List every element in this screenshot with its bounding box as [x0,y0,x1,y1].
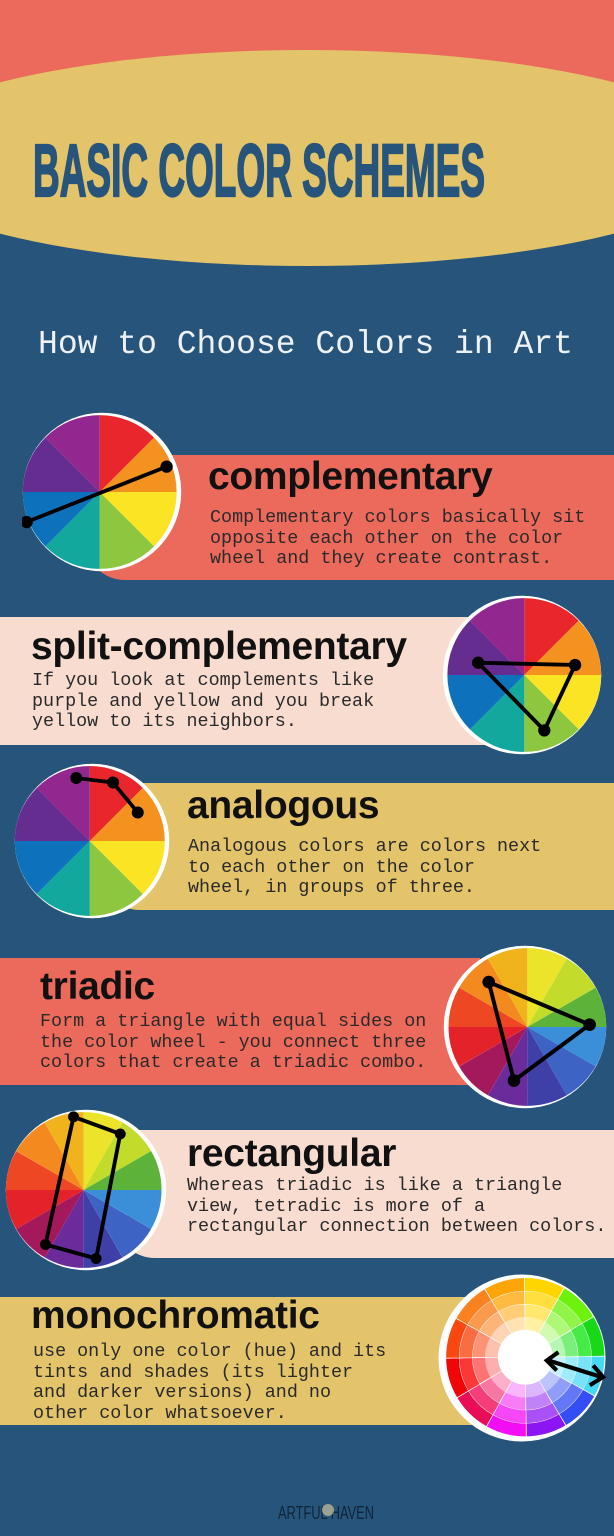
text: split-complementary description: purple and yellow and you break [32,691,374,712]
text: rectangular description [187,1175,606,1237]
text: split-complementary description [32,670,374,732]
text: monochromatic description: tints and shades (its lighter [33,1362,353,1383]
header background [0,0,614,266]
text: rectangular description: view, tetradic is more of a [187,1196,485,1217]
icon: analogous wheel [14,764,170,918]
text: analogous description: wheel, in groups of three. [188,877,475,898]
text: monochromatic description: use only one color (hue) and its [33,1341,386,1362]
icon: complementary wheel [22,412,182,572]
text: monochromatic description: other color whatsoever. [33,1403,287,1424]
heading: analogous: analogous [187,784,379,827]
heading: complementary: complementary [208,455,492,498]
text: analogous description [188,836,541,898]
subtitle: How to Choose Colors in Art [38,326,573,363]
text: triadic description [40,1011,426,1073]
heading: split-complementary: split-complementary [31,625,407,668]
text: analogous description: to each other on the color [188,857,475,878]
text: complementary description: opposite each other on the color [210,528,563,549]
heading: monochromatic: monochromatic [31,1294,320,1337]
text: split-complementary description: If you look at complements like [32,670,374,691]
heading: triadic: triadic [40,965,155,1008]
text: monochromatic description [33,1341,386,1424]
panel: triadic [0,946,606,1108]
icon: split-complementary wheel [442,596,602,754]
panel: split-complementary [0,596,602,754]
panel: monochromatic [0,1274,606,1442]
text: monochromatic description: and darker versions) and no [33,1382,331,1403]
text: analogous description: Analogous colors are colors next [188,836,541,857]
text: rectangular description: Whereas triadic is like a triangle [187,1175,562,1196]
text: triadic description: colors that create a triadic combo. [40,1052,426,1073]
panel: analogous [14,764,614,918]
icon: triadic wheel [444,946,606,1108]
icon: monochromatic wheel [438,1274,606,1442]
text: split-complementary description: yellow to its neighbors. [32,711,297,732]
text: complementary description: Complementary colors basically sit [210,507,585,528]
panel: rectangular [6,1110,614,1270]
heading: rectangular: rectangular [187,1132,396,1175]
text: rectangular description: rectangular connection between colors. [187,1216,606,1237]
panel: complementary [22,412,614,580]
text: triadic description: the color wheel - you connect three [40,1032,426,1053]
text: triadic description: Form a triangle with equal sides on [40,1011,426,1032]
text: complementary description [210,507,585,569]
icon: rectangular wheel [6,1110,166,1270]
text: complementary description: wheel and they create contrast. [210,548,552,569]
